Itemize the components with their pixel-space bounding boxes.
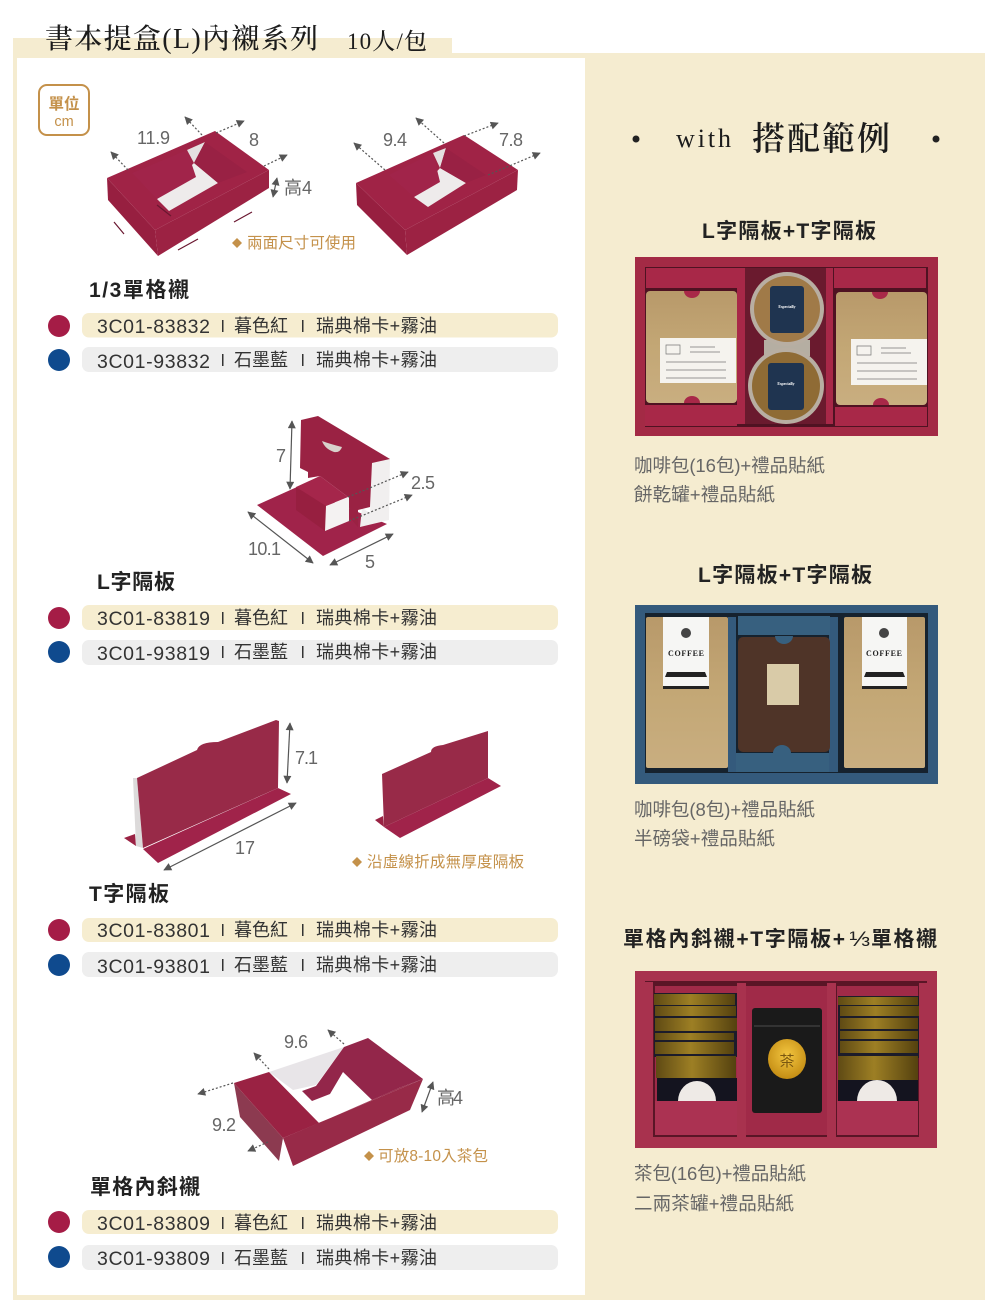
diagram: one-third liner, view one [107, 117, 312, 256]
diagram: L divider: 10.1 [248, 539, 281, 559]
row: 3C01-83801: 3C01-83801 [97, 920, 210, 942]
row: 3C01-93801: 3C01-93801 [97, 956, 210, 978]
diagram: one-third liner, view one: 高4 [284, 178, 312, 198]
example heading 3: 單格襯 [871, 928, 937, 951]
example heading 3: ⅓ [849, 928, 871, 951]
photo: navy gift box with coffee bags [635, 605, 938, 784]
row: 3C01-93809 [48, 1245, 558, 1270]
right panel heading [632, 121, 940, 158]
photo: red gift box with coffee and cookie tins [635, 257, 938, 436]
note: fold along dashed line: 沿虛線折成無厚度隔板 [367, 853, 524, 871]
diagram: single-cell slanted liner [198, 1030, 463, 1166]
row: 3C01-93801: 石墨藍 [234, 955, 288, 975]
unit badge: 單位 [48, 94, 80, 113]
row: 3C01-83819: 瑞典棉卡+霧油 [316, 608, 437, 628]
caption 1: 餅乾罐+禮品貼紙 [634, 484, 775, 505]
note: holds 8-10 tea bags: 可放8-10入茶包 [378, 1147, 488, 1165]
caption 2: 半磅袋+禮品貼紙 [634, 828, 775, 849]
example heading 2: L字隔板+T字隔板 [698, 563, 872, 587]
caption 1 [634, 455, 825, 505]
right panel heading: with [676, 124, 731, 153]
row: 3C01-83832: 3C01-83832 [97, 316, 210, 338]
row: 3C01-83832 [48, 313, 558, 338]
photo: red gift box with coffee and cookie tins: Especially [777, 381, 795, 386]
note: both sides usable: 兩面尺寸可使用 [247, 234, 356, 252]
photo: red gift box with tea bags and tea can [635, 971, 937, 1148]
row: 3C01-93819: 石墨藍 [234, 642, 288, 662]
row: 3C01-83801: 暮色紅 [234, 920, 288, 940]
diagram: T divider, standard: 17 [235, 838, 255, 858]
row: 3C01-93801: 瑞典棉卡+霧油 [316, 955, 437, 975]
caption 2: 咖啡包(8包)+禮品貼紙 [634, 799, 815, 820]
photo: red gift box with coffee and cookie tins: Especially [778, 304, 796, 309]
diagram: L divider: 2.5 [411, 473, 435, 493]
row: 3C01-83809 [48, 1210, 558, 1235]
row: 3C01-93809: 3C01-93809 [97, 1248, 210, 1270]
heading: one-third liner: 1/3單格襯 [89, 279, 189, 302]
diagram: T divider, standard [124, 720, 318, 870]
caption 3: 二兩茶罐+禮品貼紙 [634, 1193, 794, 1214]
row: 3C01-93832 [48, 347, 558, 373]
row: 3C01-83809: 暮色紅 [234, 1213, 288, 1233]
diagram: one-third liner, view one: 8 [249, 130, 259, 150]
example heading 1: L字隔板+T字隔板 [702, 219, 876, 243]
diagram: single-cell slanted liner: 9.6 [284, 1032, 308, 1052]
title [45, 23, 427, 55]
caption 1: 咖啡包(16包)+禮品貼紙 [634, 455, 825, 476]
row: 3C01-93809: 石墨藍 [234, 1248, 288, 1268]
unit badge: cm [54, 114, 74, 130]
row: 3C01-83832: 暮色紅 [234, 316, 288, 336]
example heading 3 [623, 927, 937, 951]
row: 3C01-93801 [48, 952, 558, 978]
unit badge [39, 85, 89, 135]
diagram: one-third liner, view two [354, 118, 540, 255]
photo: red gift box with tea bags and tea can: 茶 [779, 1053, 795, 1070]
heading: single-cell slanted liner: 單格內斜襯 [90, 1176, 200, 1199]
row: 3C01-93819 [48, 640, 558, 665]
row: 3C01-83832: 瑞典棉卡+霧油 [316, 316, 437, 336]
diagram: one-third liner, view two: 7.8 [499, 130, 523, 150]
title: 書本提盒(L)內襯系列 [45, 23, 318, 55]
diagram: single-cell slanted liner: 高4 [437, 1088, 463, 1108]
diagram: T divider, standard: 7.1 [295, 748, 318, 768]
diagram: L divider: 7 [276, 446, 286, 466]
photo: navy gift box with coffee bags: COFFEE [866, 649, 902, 658]
heading: L divider: L字隔板 [97, 570, 175, 594]
title: 10人/包 [347, 29, 427, 54]
diagram: L divider [248, 416, 435, 572]
caption 3 [634, 1163, 806, 1214]
row: 3C01-83809: 瑞典棉卡+霧油 [316, 1213, 437, 1233]
row: 3C01-93832: 3C01-93832 [97, 351, 210, 373]
right panel heading: 搭配範例 [752, 121, 890, 158]
diagram: single-cell slanted liner: 9.2 [212, 1115, 236, 1135]
row: 3C01-83801: 瑞典棉卡+霧油 [316, 920, 437, 940]
row: 3C01-93819: 3C01-93819 [97, 643, 210, 665]
photo: navy gift box with coffee bags: COFFEE [668, 649, 704, 658]
caption 3: 茶包(16包)+禮品貼紙 [634, 1163, 806, 1184]
diagram: one-third liner, view one: 11.9 [137, 128, 170, 148]
row: 3C01-93809: 瑞典棉卡+霧油 [316, 1248, 437, 1268]
row: 3C01-83819 [48, 605, 558, 630]
diagram: L divider: 5 [365, 552, 375, 572]
row: 3C01-83809: 3C01-83809 [97, 1213, 210, 1235]
row: 3C01-93832: 瑞典棉卡+霧油 [316, 350, 437, 370]
example heading 3: 單格內斜襯+T字隔板+ [623, 927, 845, 951]
row: 3C01-93819: 瑞典棉卡+霧油 [316, 642, 437, 662]
row: 3C01-83819: 3C01-83819 [97, 608, 210, 630]
diagram: one-third liner, view two: 9.4 [383, 130, 407, 150]
heading: T divider: T字隔板 [89, 882, 169, 906]
diagram: T divider, folded flat [375, 731, 501, 838]
caption 2 [634, 799, 815, 849]
row: 3C01-83801 [48, 918, 558, 942]
row: 3C01-93832: 石墨藍 [234, 350, 288, 370]
row: 3C01-83819: 暮色紅 [234, 608, 288, 628]
